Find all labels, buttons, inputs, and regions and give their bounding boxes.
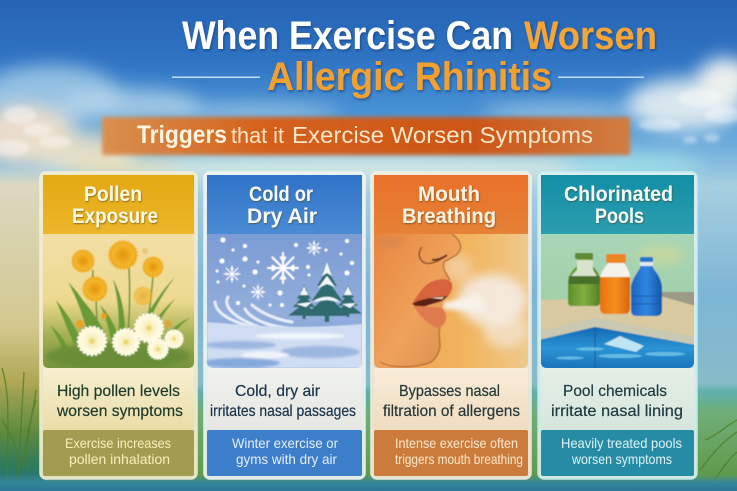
- mouth breathing footer note: triggers mouth breathing: [395, 451, 523, 467]
- cold air footer note: [207, 430, 362, 476]
- title: Allergic Rhinitis: [267, 55, 552, 99]
- mouth breathing description: Bypasses nasal: [399, 383, 500, 400]
- mouth breathing footer note: [374, 430, 528, 476]
- mouth breathing description: filtration of allergens: [383, 403, 520, 420]
- pollen description: High pollen levels: [57, 383, 180, 400]
- mouth breathing heading: Mouth: [418, 183, 480, 206]
- subtitle banner: Exercise Worsen Symptoms: [292, 122, 593, 148]
- illustration: face exhaling through mouth: [372, 232, 530, 370]
- subtitle banner: that it: [231, 123, 284, 148]
- pools footer note: Heavily treated pools: [561, 435, 682, 451]
- pools heading: [541, 175, 694, 234]
- pools footer note: [541, 430, 694, 476]
- pools description: irritate nasal lining: [551, 403, 683, 420]
- pollen heading: Exposure: [72, 205, 158, 228]
- title: Worsen: [524, 14, 657, 58]
- mouth breathing description: [374, 368, 528, 430]
- panel: chlorinated pools: [538, 172, 697, 479]
- cold air heading: Dry Air: [247, 205, 317, 228]
- pollen description: [43, 368, 194, 430]
- pollen heading: Pollen: [84, 183, 142, 206]
- cold air footer note: gyms with dry air: [236, 451, 337, 467]
- panel: mouth breathing: [371, 172, 531, 479]
- cold air heading: Cold or: [249, 183, 313, 206]
- pollen description: worsen symptoms: [56, 403, 183, 420]
- panel: pollen exposure: [40, 172, 197, 479]
- cold air heading: [207, 175, 362, 234]
- title: When Exercise Can: [182, 14, 513, 58]
- subtitle banner: [102, 117, 630, 155]
- pollen footer note: Exercise increases: [65, 435, 171, 451]
- pools heading: Chlorinated: [564, 183, 673, 206]
- pools description: Pool chemicals: [563, 383, 667, 400]
- mouth breathing heading: Breathing: [402, 205, 496, 228]
- cold air footer note: Winter exercise or: [232, 435, 338, 451]
- illustration: snow, wind and pine trees: [200, 232, 364, 370]
- subtitle banner: Triggers: [137, 121, 227, 149]
- pollen footer note: pollen inhalation: [69, 451, 170, 467]
- mouth breathing heading: [374, 175, 528, 234]
- cold air description: [207, 368, 362, 430]
- mouth breathing footer note: Intense exercise often: [395, 435, 518, 451]
- pools footer note: worsen symptoms: [571, 451, 672, 467]
- illustration: flowers and grass: [41, 232, 196, 370]
- illustration: chemical bottles beside pool: [539, 232, 696, 370]
- title: [172, 14, 657, 99]
- cold air description: Cold, dry air: [235, 383, 321, 400]
- cold air description: irritates nasal passages: [210, 403, 356, 420]
- pollen footer note: [43, 430, 194, 476]
- pools heading: Pools: [595, 205, 644, 228]
- pollen heading: [43, 175, 194, 234]
- panel: cold or dry air: [200, 172, 365, 479]
- pools description: [541, 368, 694, 430]
